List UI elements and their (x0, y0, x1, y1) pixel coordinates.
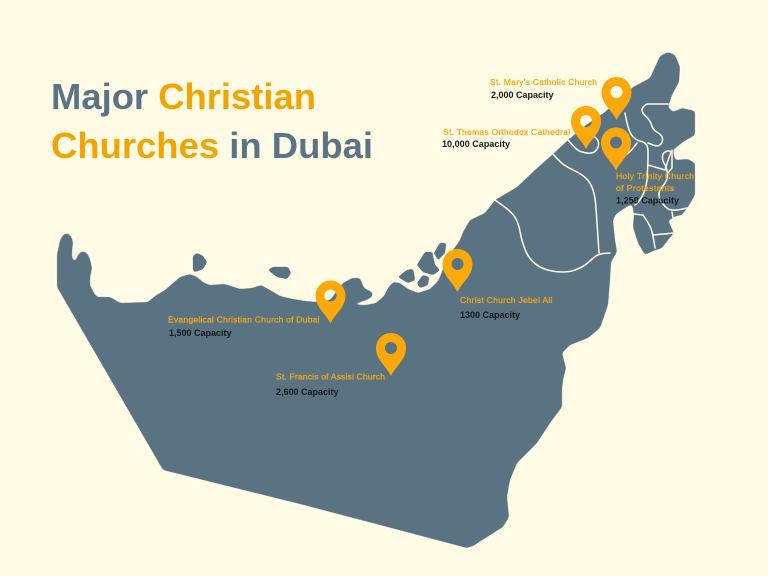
pin: St. Thomas Orthodox Cathedral (571, 106, 601, 149)
label: St. Francis of Assisi Church: St. Francis of Assisi Church (276, 372, 385, 382)
label: Holy Trinity Church of Protestants: Holy Trinity Church (616, 171, 694, 181)
label: Holy Trinity Church of Protestants: 1,250 Capacity (616, 196, 679, 206)
title: Churches in Dubai (51, 125, 373, 166)
label: St. Thomas Orthodox Cathedral: St. Thomas Orthodox Cathedral (443, 127, 570, 137)
title: Major Christian (51, 76, 316, 117)
title (51, 76, 373, 166)
label: St. Mary's Catholic Church (490, 77, 597, 100)
label: Evangelical Christian Church of Dubai: 1,500 Capacity (169, 328, 232, 338)
label: Holy Trinity Church of Protestants: of Protestants (616, 183, 674, 193)
pin: Evangelical Christian Church (316, 280, 346, 324)
label: Holy Trinity Church of Protestants (616, 171, 694, 206)
label: St. Mary's Catholic Church: St. Mary's Catholic Church (490, 77, 597, 87)
emirate boundaries (495, 104, 687, 272)
label: St. Thomas Orthodox Cathedral (442, 127, 570, 149)
label: Christ Church Jebel Ali: 1300 Capacity (460, 310, 520, 320)
label: Christ Church Jebel Ali: Christ Church Jebel Ali (460, 295, 553, 305)
map of the UAE (57, 52, 695, 548)
label: St. Francis of Assisi Church (276, 372, 385, 397)
pin: St. Mary's Catholic Church (602, 77, 632, 120)
label: Evangelical Christian Church of Dubai: Evangelical Christian Church of Dubai (168, 314, 320, 324)
pin: Christ Church Jebel Ali (442, 249, 472, 292)
pin: Holy Trinity Church (601, 128, 631, 170)
label: Evangelical Christian Church of Dubai (168, 314, 320, 338)
label: St. Mary's Catholic Church: 2,000 Capacity (491, 90, 554, 100)
label: St. Francis of Assisi Church: 2,600 Capacity (276, 387, 338, 397)
pin: St. Francis of Assisi Church (376, 333, 406, 376)
label: St. Thomas Orthodox Cathedral: 10,000 Capacity (442, 139, 510, 149)
islands (193, 243, 446, 288)
map landmass (57, 52, 695, 548)
label: Christ Church Jebel Ali (460, 295, 553, 320)
